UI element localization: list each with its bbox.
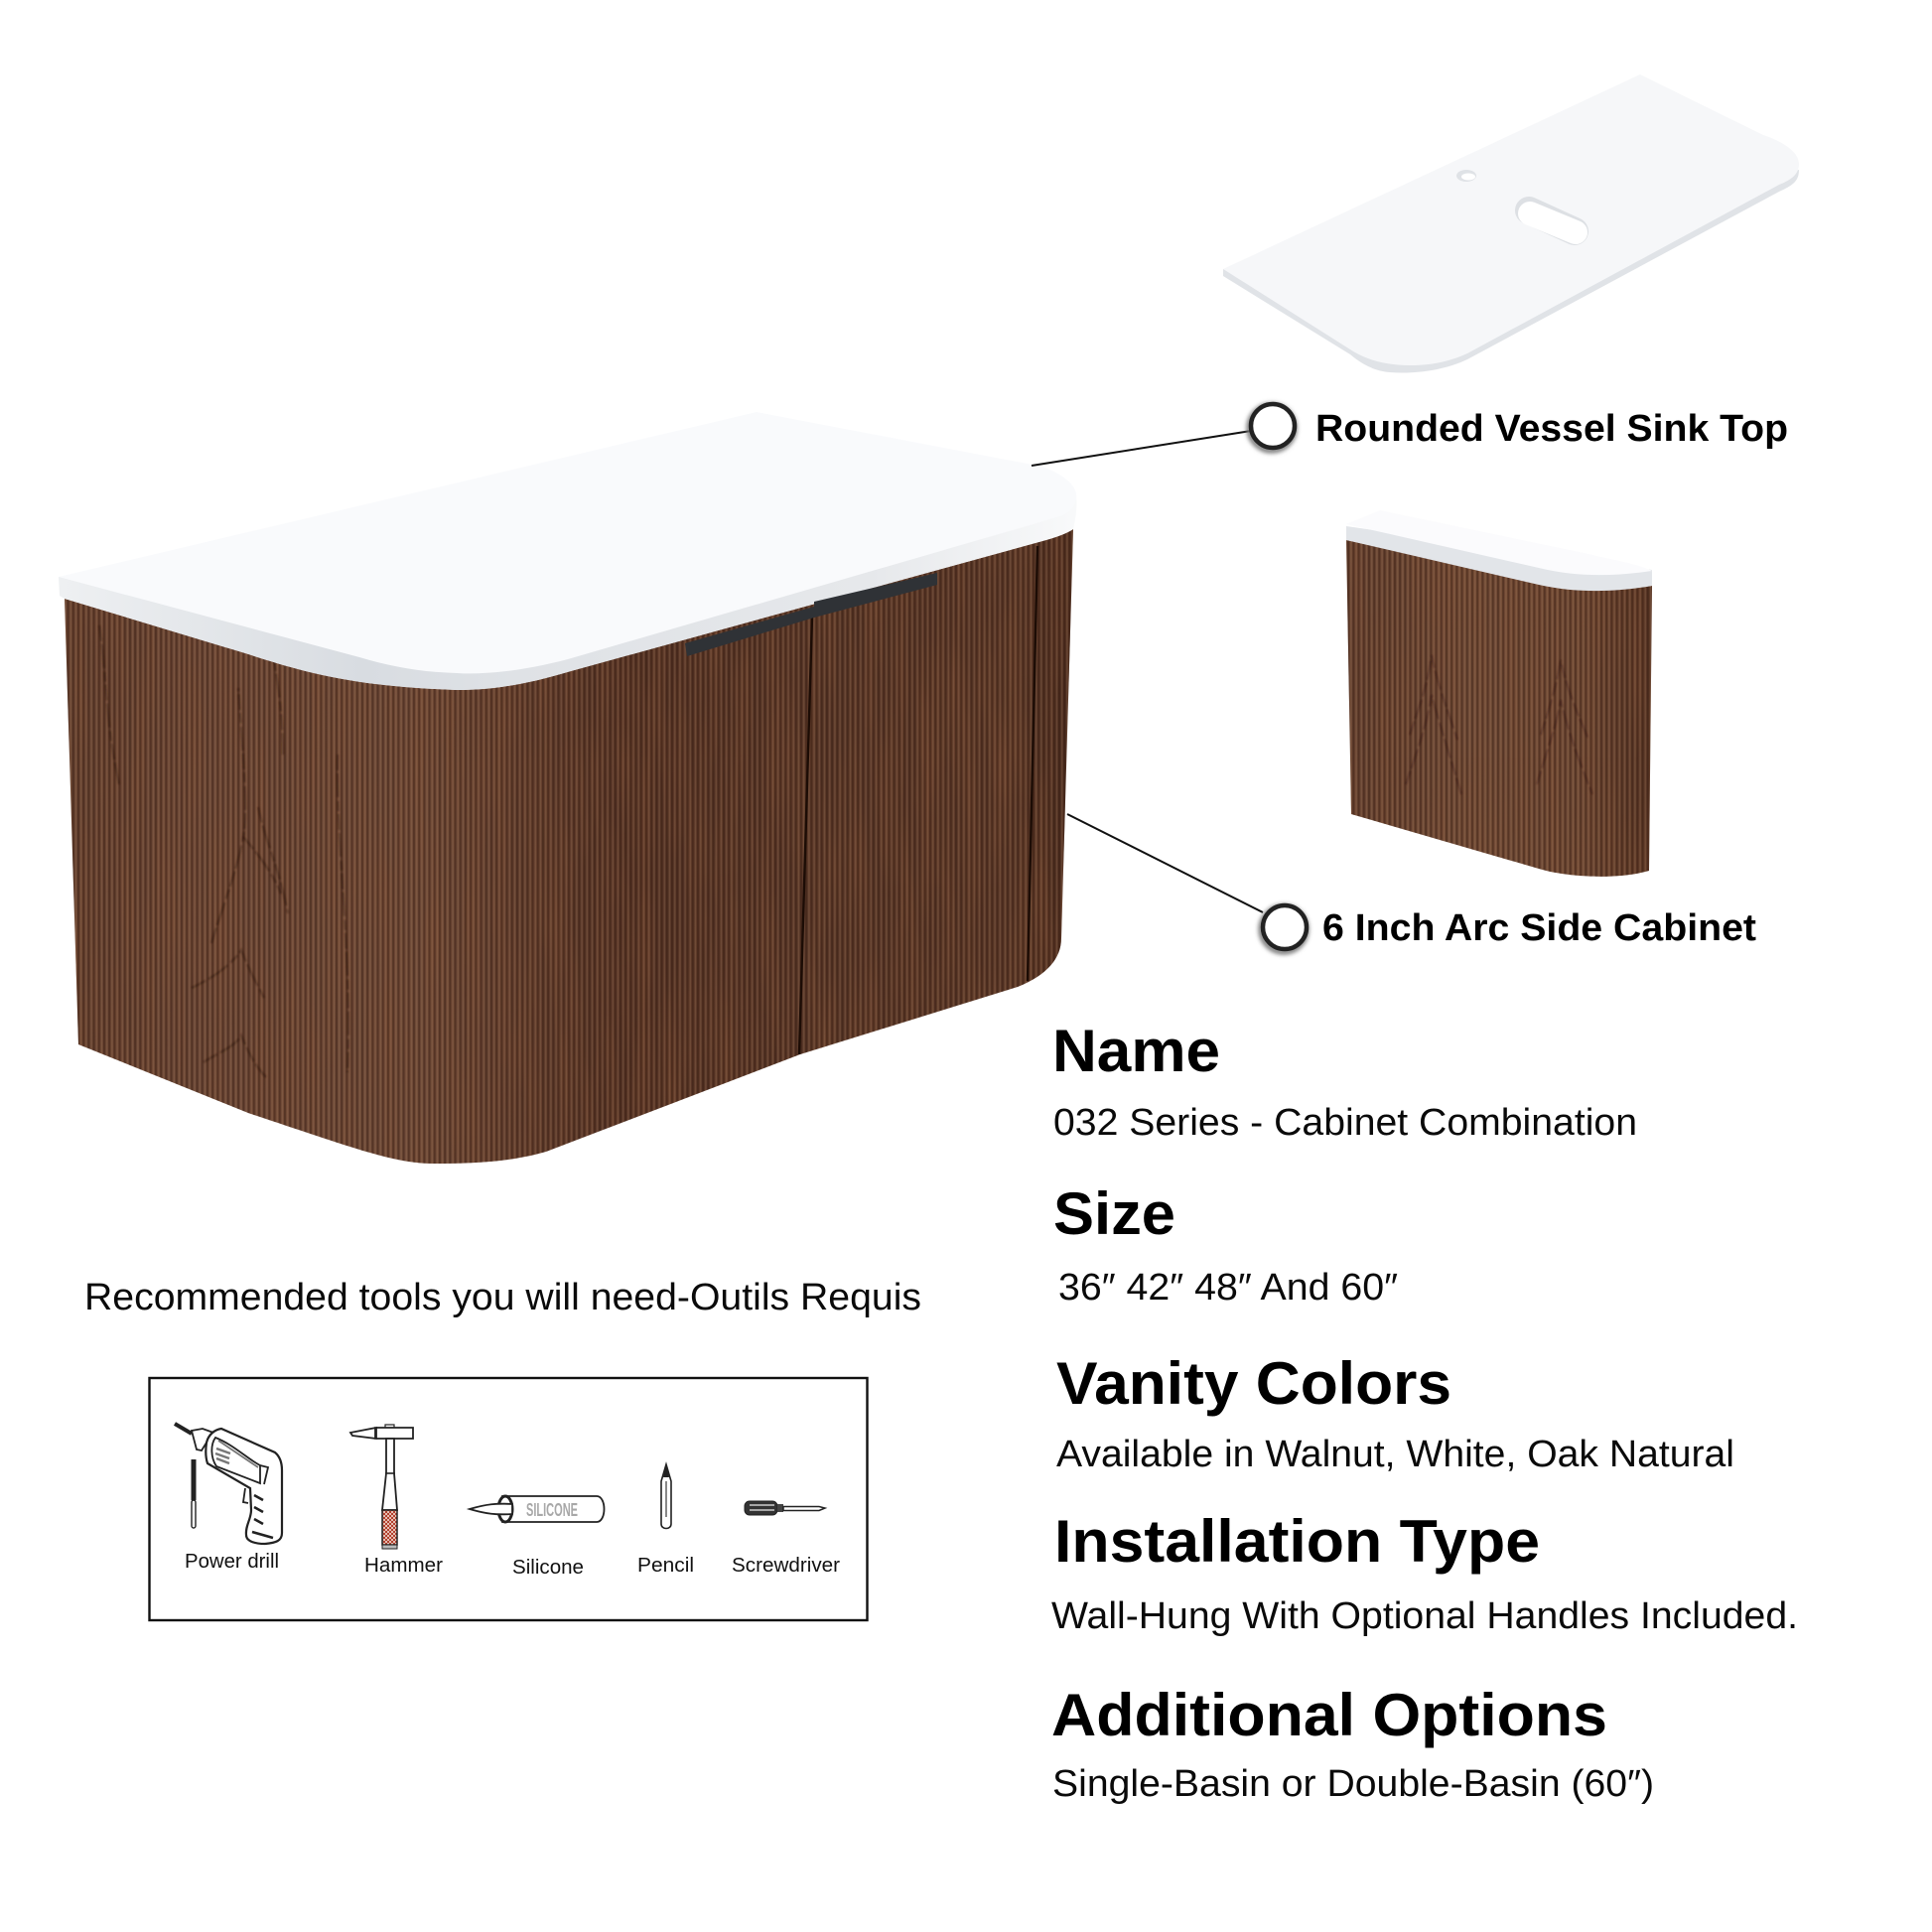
label: silicone: Silicone <box>512 1557 584 1579</box>
sink top surface <box>59 412 1076 673</box>
faucet hole <box>1456 170 1476 182</box>
side cabinet product view <box>1340 510 1658 884</box>
spec: additional options: Single-Basin or Double-Basin (60″) <box>1052 1763 1654 1805</box>
spec: vanity colors: Vanity Colors <box>1056 1350 1451 1417</box>
spec: additional options <box>1051 1682 1654 1805</box>
icon: screwdriver <box>745 1501 825 1515</box>
spec: size: Size <box>1053 1180 1175 1247</box>
spec: installation type: Wall-Hung With Optional Handles Included. <box>1051 1595 1798 1637</box>
label: power drill: Power drill <box>185 1551 279 1573</box>
spec: name <box>1052 1018 1637 1144</box>
callout label: sink top: Rounded Vessel Sink Top <box>1315 408 1788 450</box>
spec: additional options: Additional Options <box>1051 1682 1607 1748</box>
side cabinet top edge <box>1346 526 1652 591</box>
spec: installation type <box>1051 1508 1798 1637</box>
icon: silicone tube: SILICONE <box>526 1500 578 1520</box>
spec: installation type: Installation Type <box>1054 1508 1540 1575</box>
door handles <box>685 573 937 656</box>
sink top edge <box>59 467 1076 690</box>
spec: size <box>1053 1180 1398 1309</box>
sink top product view <box>1223 74 1799 372</box>
side cabinet top surface <box>1346 510 1652 575</box>
leader line: side cabinet <box>1067 814 1263 912</box>
door seams <box>799 546 1037 1054</box>
specification list <box>1051 1018 1798 1805</box>
icon: silicone tube <box>470 1496 604 1522</box>
tools panel <box>149 1378 868 1620</box>
icon: pencil <box>661 1464 671 1529</box>
main vanity cabinet <box>59 516 1073 1164</box>
spec: vanity colors: Available in Walnut, White, Oak Natural <box>1056 1434 1734 1475</box>
cabinet wood body <box>60 516 1082 1172</box>
icon: hammer <box>350 1425 413 1549</box>
spec: vanity colors <box>1056 1350 1734 1475</box>
leader line: sink top <box>1032 431 1251 466</box>
label: screwdriver: Screwdriver <box>732 1555 840 1577</box>
callout label: side cabinet: 6 Inch Arc Side Cabinet <box>1322 907 1756 949</box>
spec: name: 032 Series - Cabinet Combination <box>1053 1102 1637 1144</box>
basin cut-out <box>1529 210 1576 232</box>
label: pencil: Pencil <box>637 1555 694 1577</box>
spec: name: Name <box>1052 1018 1220 1084</box>
label: hammer: Hammer <box>364 1555 443 1577</box>
callout marker: side cabinet <box>1261 905 1307 952</box>
icon: power drill <box>175 1424 282 1544</box>
callout marker: sink top <box>1249 404 1295 451</box>
spec: size: 36″ 42″ 48″ And 60″ <box>1058 1267 1398 1309</box>
tools heading: Recommended tools you will need-Outils Requis <box>84 1277 921 1318</box>
